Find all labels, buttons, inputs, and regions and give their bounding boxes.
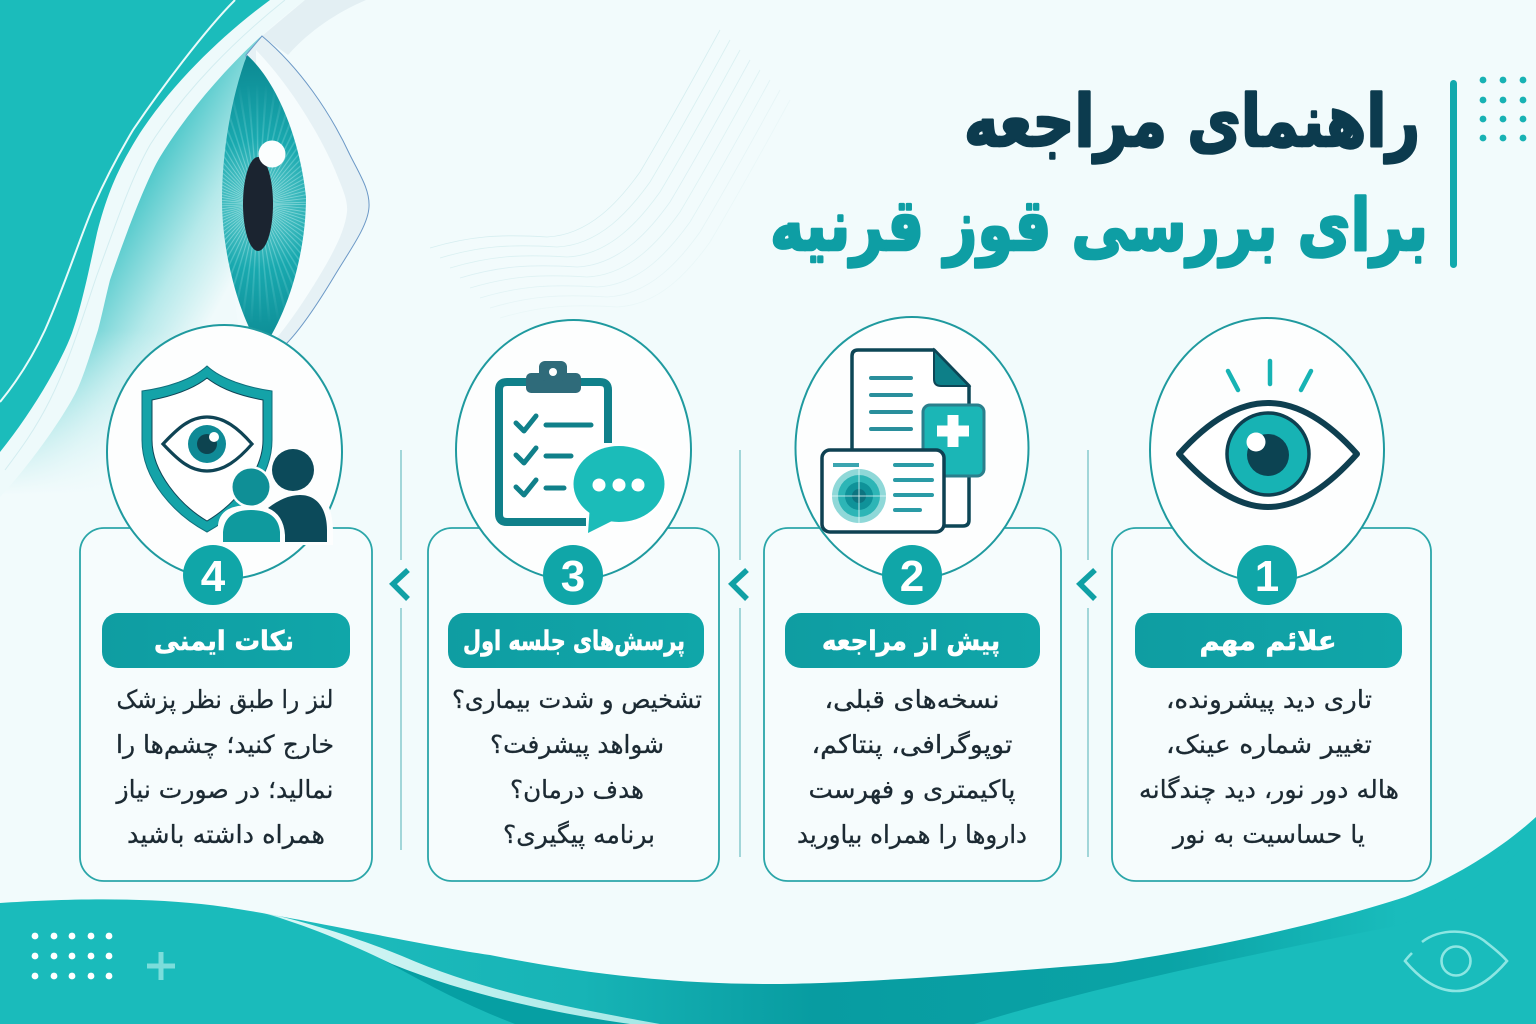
card 2: [764, 528, 1061, 881]
icon: eye with rays: [1179, 361, 1357, 507]
icon: plus sign: [147, 952, 175, 980]
body text 3: تشخیص و شدت بیماری؟: [452, 685, 702, 715]
icon circle 3: [456, 320, 691, 580]
body text 4: نمالید؛ در صورت نیاز: [114, 775, 333, 804]
number badge 2: [882, 545, 942, 605]
number badge 3: [543, 545, 603, 605]
highlight: [258, 140, 286, 168]
card 1: [1112, 528, 1431, 881]
number badge 1: [1237, 545, 1297, 605]
icon circle 2: [796, 317, 1028, 579]
number badge 4: [183, 545, 243, 605]
title line 1: راهنمای مراجعه: [964, 79, 1420, 164]
eyelid strip: [262, 0, 366, 55]
arrow: step 2 to 3: [726, 560, 754, 608]
illustration: large eye side profile: [222, 0, 370, 344]
heading 1: علائم مهم: [1200, 626, 1336, 657]
number badge 3: 3: [561, 552, 585, 601]
body text 1: هاله دور نور، دید چندگانه: [1139, 775, 1399, 805]
corner swoosh: top left: [0, 0, 305, 520]
icon: documents and topography card: [822, 350, 984, 532]
decorative dots: bottom left: [32, 933, 112, 979]
body text 2: داروها را همراه بیاورید: [797, 820, 1027, 850]
heading 3: پرسش‌های جلسه اول: [463, 626, 685, 657]
panel: step 2 before the visit: [764, 317, 1061, 881]
icon circle 1: [1150, 318, 1384, 582]
heading 1: [1135, 613, 1402, 668]
number badge 2: 2: [900, 552, 924, 601]
heading 2: پیش از مراجعه: [822, 626, 1000, 657]
number badge 4: 4: [201, 552, 226, 601]
body text 1: [1139, 685, 1399, 849]
card 4: [80, 528, 372, 881]
icon: clipboard and speech bubble: [499, 361, 667, 533]
panel: step 1 important symptoms: [1112, 318, 1431, 881]
body text 2: [797, 685, 1027, 850]
heading 3: [448, 613, 704, 668]
number badge 1: 1: [1255, 552, 1279, 601]
arrow: step 1 to 2: [1074, 560, 1102, 608]
body text 1: تغییر شماره عینک،: [1166, 730, 1372, 759]
dividers: [401, 450, 1088, 857]
heading 4: [102, 613, 350, 668]
icon circle 4: [107, 325, 342, 579]
panel: step 3 first session questions: [428, 320, 719, 881]
heading 2: [785, 613, 1040, 668]
panel: step 4 safety tips: [80, 325, 372, 881]
body text 4: [114, 685, 334, 849]
icon: outline eye bottom right: [1405, 932, 1507, 991]
body text 4: همراه داشته باشید: [127, 820, 325, 849]
iris: [222, 55, 306, 334]
icon: shield with eye and people: [142, 366, 333, 545]
body text 2: توپوگرافی، پنتاکم،: [812, 730, 1013, 760]
arrow: step 3 to 4: [387, 560, 415, 608]
decorative dots: top right: [1480, 77, 1526, 141]
body text 2: نسخه‌های قبلی،: [824, 685, 1000, 714]
body text 1: تاری دید پیشرونده،: [1166, 685, 1372, 715]
heading 4: نکات ایمنی: [154, 626, 294, 657]
body text 4: خارج کنید؛ چشم‌ها را: [116, 730, 334, 760]
title accent bar: [1450, 80, 1457, 268]
body text 3: [452, 685, 702, 849]
body text 4: لنز را طبق نظر پزشک: [116, 685, 334, 714]
body text 3: هدف درمان؟: [510, 775, 644, 804]
footer wave: [0, 817, 1536, 1024]
title block: [770, 79, 1428, 268]
cornea bulge: [246, 36, 369, 344]
body text 2: پاکیمتری و فهرست: [808, 775, 1016, 805]
card 3: [428, 528, 719, 881]
body text 1: یا حساسیت به نور: [1171, 820, 1365, 849]
pupil: [243, 157, 273, 251]
body text 3: برنامه پیگیری؟: [503, 820, 655, 849]
body text 3: شواهد پیشرفت؟: [490, 730, 664, 759]
